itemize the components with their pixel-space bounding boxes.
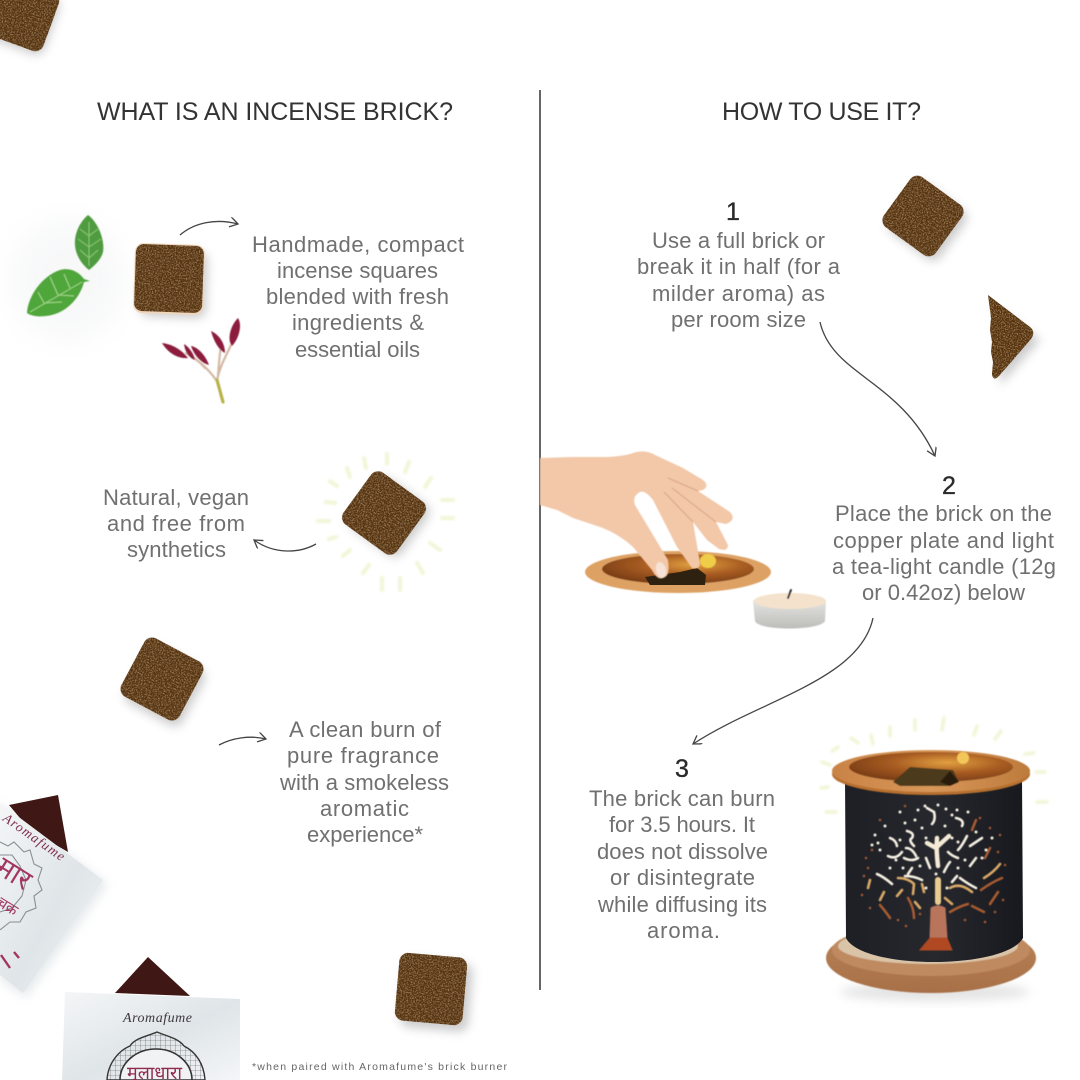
shadow <box>840 983 1030 1001</box>
text block: clean burn: with a smokeless <box>279 770 449 795</box>
text block: handmade: blended with fresh <box>266 284 449 309</box>
icon: upper leaf <box>75 215 103 270</box>
text block: step 1: per room size <box>671 307 806 332</box>
icon: half brick <box>988 295 1040 385</box>
number 1: 1 <box>726 198 740 226</box>
icon: tea light candle <box>753 590 826 628</box>
divider <box>539 90 541 990</box>
text block: step 3: The brick can burn <box>589 786 775 811</box>
icon: hand <box>540 451 733 579</box>
arrow: step 2 to step 3 <box>693 618 873 744</box>
icon: brick glowing <box>338 468 434 561</box>
icon: copper plate <box>585 551 771 593</box>
brick: top left corner <box>0 0 64 57</box>
text block: step 1: Use a full brick or <box>652 228 825 253</box>
panel: clean burn <box>115 634 449 847</box>
illustration: hand placing brick on copper plate <box>540 451 826 628</box>
heading: how to use it: HOW TO USE IT? <box>722 98 921 126</box>
packet: upright brick sachet: Aromafume <box>122 1011 192 1026</box>
footnote: *when paired with Aromafume's brick burner <box>252 1061 508 1073</box>
text block: step 3: or disintegrate <box>610 865 755 890</box>
text block: handmade: Handmade, compact <box>252 232 464 257</box>
icon: brick <box>133 243 208 318</box>
icon: glow rays <box>821 718 1047 812</box>
number 3: 3 <box>675 755 689 783</box>
arrow: step 1 to step 2 <box>820 322 935 456</box>
illustration: incense burner with tree cutout <box>821 718 1047 1001</box>
packet: tilted brick sachet: Aromafume <box>0 810 68 864</box>
arrow: brick to text <box>180 221 238 235</box>
text block: step 3: for 3.5 hours. It <box>609 812 755 837</box>
text block: handmade: ingredients & <box>292 310 424 335</box>
text block: handmade <box>252 232 464 362</box>
brick: bottom centre <box>394 952 474 1032</box>
text block: clean burn <box>279 717 449 847</box>
text block: natural: Natural, vegan <box>103 485 249 510</box>
heading: what is an incense brick: WHAT IS AN INCENSE BRICK? <box>97 98 453 126</box>
text block: step 2: Place the brick on the <box>835 501 1052 526</box>
text block: clean burn: A clean burn of <box>289 717 442 742</box>
text block: handmade: essential oils <box>295 337 420 362</box>
step 1: brick and text <box>637 172 1040 385</box>
icon: red flower sprig <box>162 318 240 402</box>
number 2: 2 <box>942 472 956 500</box>
soft shadow behind leaves <box>10 218 126 342</box>
text block: step 1 <box>637 228 841 332</box>
text block: step 3: does not dissolve <box>597 839 768 864</box>
text block: step 2: or 0.42oz) below <box>862 580 1025 605</box>
text block: step 2: a tea-light candle (12g <box>832 554 1056 579</box>
icon: glow rays <box>318 454 453 590</box>
text block: clean burn: pure fragrance <box>287 743 439 768</box>
icon: tree cutout <box>862 805 1005 950</box>
icon: brick <box>115 634 211 730</box>
text block: step 1: break it in half (for a <box>637 254 841 279</box>
packet: upright brick sachet <box>62 957 240 1080</box>
text block: step 3: while diffusing its <box>597 892 767 917</box>
text block: natural: and free from <box>107 511 245 536</box>
icon: brick on plate <box>645 568 706 585</box>
text block: step 3 <box>589 786 775 943</box>
text block: step 1: milder aroma) as <box>652 281 825 306</box>
text block: step 3: aroma. <box>647 918 720 943</box>
icon: lower leaf <box>27 269 90 316</box>
text block: clean burn: experience* <box>307 822 423 847</box>
packet: tilted brick sachet <box>0 795 108 998</box>
text block: step 2: copper plate and light <box>833 528 1054 553</box>
text block: step 2 <box>832 501 1056 605</box>
text block: natural <box>103 485 249 562</box>
icon: full brick <box>878 172 972 264</box>
icon: black cylinder body <box>845 778 1023 962</box>
panel: natural vegan <box>103 454 453 590</box>
text block: natural: synthetics <box>127 537 226 562</box>
panel: ingredients illustration <box>10 215 464 402</box>
icon: clay saucer <box>826 923 1036 993</box>
text block: handmade: incense squares <box>277 258 438 283</box>
arrow: brick to text <box>254 540 316 551</box>
icon: copper rim and bowl <box>832 750 1030 795</box>
arrow: to text <box>219 737 266 745</box>
step 3 <box>589 755 775 943</box>
text block: clean burn: aromatic <box>320 796 409 821</box>
step 2 <box>832 472 1056 605</box>
